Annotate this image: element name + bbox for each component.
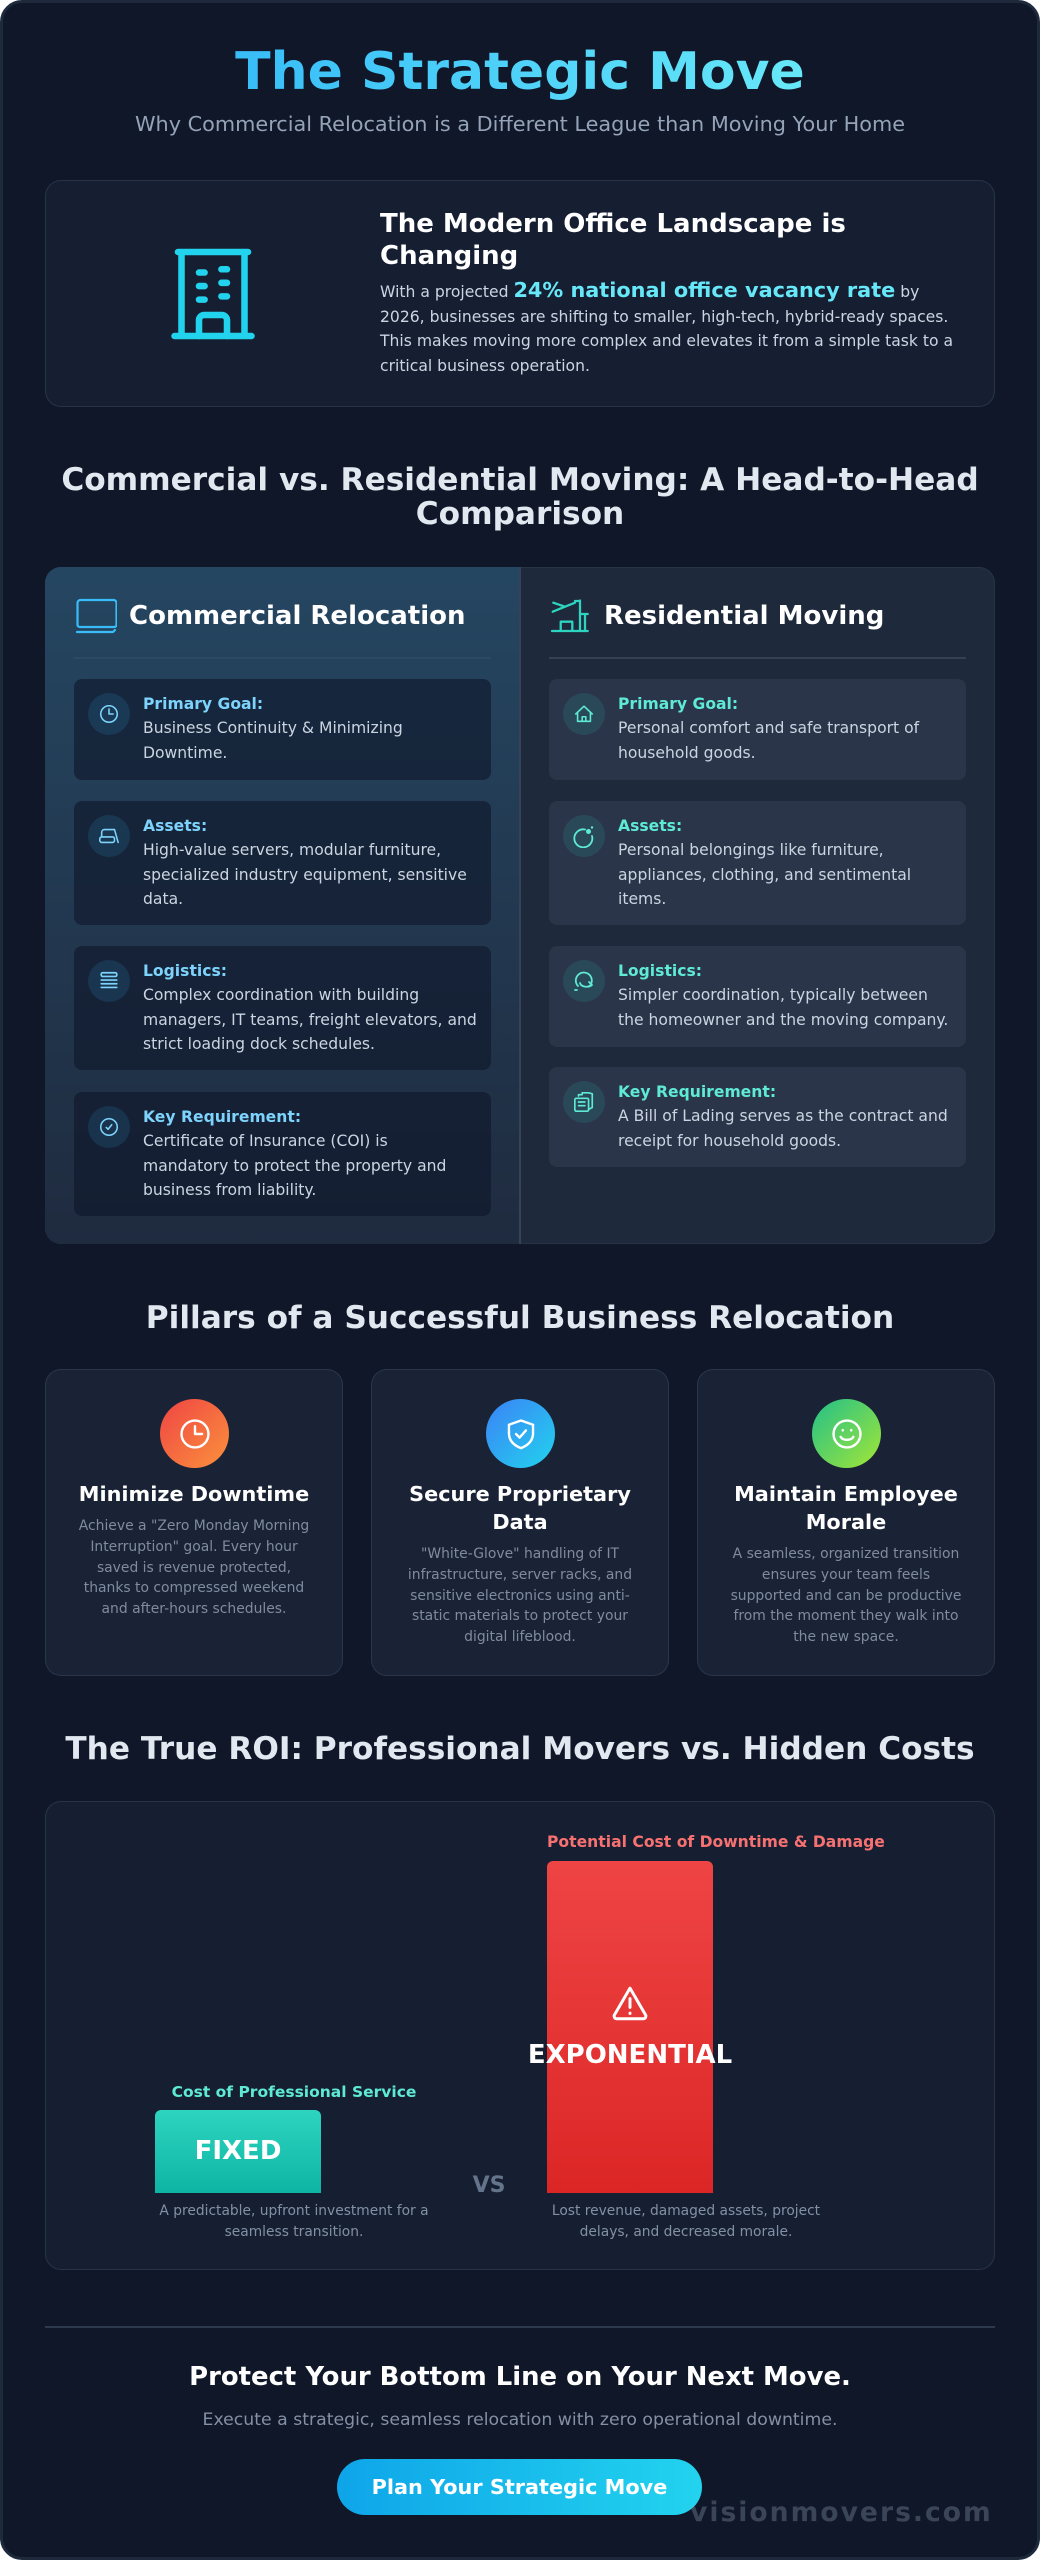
pillar: employee morale <box>697 1369 995 1676</box>
text: key requirement: receipt for household goods. <box>618 1132 841 1150</box>
text: assets: High-value servers, modular furniture, <box>143 841 441 859</box>
call to action button: Plan Your Strategic Move <box>372 2475 667 2499</box>
pillar title <box>734 1482 958 1534</box>
pillar: secure data <box>371 1369 669 1676</box>
heading: comparison: Commercial vs. Residential Moving: A Head-to-Head <box>61 462 979 498</box>
label: professional cost: Cost of Professional Service <box>172 2083 416 2101</box>
pillar title <box>409 1482 631 1534</box>
intro heading <box>380 209 846 271</box>
text: logistics: strict loading dock schedules. <box>143 1035 375 1053</box>
pillar description <box>731 1546 961 1645</box>
text: logistics: the homeowner and the moving company. <box>618 1011 948 1029</box>
icon: check circle <box>88 1106 130 1148</box>
call to action heading: Protect Your Bottom Line on Your Next Move. <box>189 2362 851 2392</box>
text: logistics: Complex coordination with building <box>143 986 419 1004</box>
intro text: 2026, businesses are shifting to smaller, high-tech, hybrid-ready spaces. <box>380 308 948 326</box>
text: primary goal: Primary Goal: <box>618 695 738 713</box>
residential: primary goal <box>549 679 966 780</box>
intro heading: The Modern Office Landscape is <box>380 209 846 239</box>
pillar title: Data <box>492 1510 548 1534</box>
text: logistics: managers, IT teams, freight elevators, and <box>143 1011 477 1029</box>
pillar: minimize downtime <box>45 1369 343 1676</box>
text: logistics: Simpler coordination, typically between <box>618 986 928 1004</box>
text: assets <box>143 817 467 908</box>
icon: coordination <box>563 960 605 1002</box>
description: exponential: Lost revenue, damaged assets, project <box>552 2203 820 2219</box>
icon: home <box>563 693 605 735</box>
text: assets: Assets: <box>143 817 207 835</box>
text: key requirement: Key Requirement: <box>143 1108 301 1126</box>
heading: pillars: Pillars of a Successful Business Relocation <box>146 1300 894 1336</box>
bar: fixed <box>155 2110 321 2193</box>
commercial: logistics <box>74 946 491 1070</box>
column background: commercial <box>45 567 519 1244</box>
description: fixed <box>159 2203 429 2240</box>
bar: exponential <box>547 1861 713 2193</box>
text: assets: appliances, clothing, and sentimental <box>618 866 911 884</box>
text: assets: data. <box>143 890 183 908</box>
pillar description <box>78 1518 309 1617</box>
pillar description: ensures your team feels <box>762 1567 930 1583</box>
pillar title: Secure Proprietary <box>409 1482 631 1506</box>
footer rule <box>45 2326 995 2328</box>
heading: comparison <box>61 462 979 532</box>
bar value: exponential: EXPONENTIAL <box>528 2040 732 2070</box>
text: primary goal <box>143 695 403 762</box>
commercial: key requirement <box>74 1092 491 1216</box>
right header rule <box>549 657 966 659</box>
pillar title: Minimize Downtime <box>79 1482 309 1506</box>
text: key requirement: Certificate of Insurance (COI) is <box>143 1132 388 1150</box>
icon: office building <box>171 248 255 340</box>
residential: assets <box>549 801 966 925</box>
intro text: critical business operation. <box>380 356 590 374</box>
pillar description: infrastructure, server racks, and <box>408 1567 632 1583</box>
pillar description: Interruption" goal. Every hour <box>90 1539 298 1555</box>
text: primary goal: Business Continuity & Minimizing <box>143 719 403 737</box>
description: exponential: delays, and decreased morale. <box>580 2224 792 2240</box>
watermark: visionmovers.com <box>690 2497 993 2528</box>
text: assets: specialized industry equipment, sensitive <box>143 866 467 884</box>
label: downtime cost: Potential Cost of Downtime & Damage <box>547 1833 885 1851</box>
panel: ROI chart <box>45 1801 995 2270</box>
commercial: primary goal <box>74 679 491 780</box>
icon: smile badge <box>812 1399 881 1468</box>
intro text <box>380 278 953 374</box>
intro heading: Changing <box>380 241 518 271</box>
pillar description <box>408 1546 632 1645</box>
text: assets <box>618 817 911 908</box>
description: exponential <box>552 2203 820 2240</box>
text: key requirement: business from liability. <box>143 1181 316 1199</box>
pillar title: Maintain Employee <box>734 1482 958 1506</box>
intro text: With a projected 24% national office vacancy rate by <box>380 278 919 302</box>
icon: clock <box>88 693 130 735</box>
description: fixed: seamless transition. <box>225 2224 363 2240</box>
pillar description: "White-Glove" handling of IT <box>421 1546 619 1562</box>
call to action button <box>337 2459 702 2515</box>
icon: residential house <box>550 599 589 632</box>
text: assets: items. <box>618 890 666 908</box>
text: primary goal: Primary Goal: <box>143 695 263 713</box>
title: The Strategic Move <box>235 42 805 102</box>
intro text: This makes moving more complex and elevates it from a simple task to a <box>380 332 953 350</box>
header <box>135 42 905 136</box>
text: assets: Personal belongings like furniture, <box>618 841 884 859</box>
pillar description: Achieve a "Zero Monday Morning <box>79 1518 309 1534</box>
icon: warning <box>612 1986 648 2020</box>
text: primary goal: household goods. <box>618 744 756 762</box>
icon: laptop <box>76 598 117 634</box>
icon: clock badge <box>160 1399 229 1468</box>
pillar title: Morale <box>806 1510 886 1534</box>
panel: office landscape intro <box>45 180 995 407</box>
text: logistics <box>143 962 477 1053</box>
text: logistics: Logistics: <box>143 962 227 980</box>
column title: residential: Residential Moving <box>604 601 884 631</box>
subtitle: Why Commercial Relocation is a Different League than Moving Your Home <box>135 112 905 136</box>
text: key requirement <box>618 1083 948 1150</box>
column divider <box>519 567 521 1244</box>
text: primary goal: Personal comfort and safe transport of <box>618 719 919 737</box>
pillar description: and after-hours schedules. <box>102 1601 286 1617</box>
description: fixed: A predictable, upfront investment for a <box>159 2203 429 2219</box>
pillar description: saved is revenue protected, <box>97 1560 291 1576</box>
pillar description: sensitive electronics using anti- <box>410 1588 630 1604</box>
icon: seat <box>88 815 130 857</box>
column title: commercial: Commercial Relocation <box>129 601 466 631</box>
commercial: assets <box>74 801 491 925</box>
icon: stack <box>88 960 130 1002</box>
heading: ROI: The True ROI: Professional Movers vs. Hidden Costs <box>65 1731 975 1767</box>
text: key requirement: A Bill of Lading serves as the contract and <box>618 1107 948 1125</box>
heading: comparison: Comparison <box>416 496 624 532</box>
icon: belongings <box>563 815 605 857</box>
pillar description: from the moment they walk into <box>734 1608 958 1624</box>
text: primary goal: Downtime. <box>143 744 227 762</box>
pillar description: supported and can be productive <box>731 1588 961 1604</box>
bar value: fixed: FIXED <box>195 2136 281 2166</box>
text: assets: Assets: <box>618 817 682 835</box>
panel: comparison <box>45 567 995 1244</box>
text: key requirement: Key Requirement: <box>618 1083 776 1101</box>
VS label: VS <box>473 2173 505 2198</box>
text: logistics <box>618 962 948 1029</box>
pillar description: static materials to protect your <box>412 1608 628 1624</box>
call to action text: Execute a strategic, seamless relocation with zero operational downtime. <box>203 2410 837 2430</box>
left header rule <box>74 657 491 659</box>
pillar description: digital lifeblood. <box>464 1629 576 1645</box>
residential: key requirement <box>549 1067 966 1167</box>
pillar description: A seamless, organized transition <box>733 1546 959 1562</box>
residential: logistics <box>549 946 966 1047</box>
pillar description: thanks to compressed weekend <box>84 1580 304 1596</box>
icon: shield badge <box>486 1399 555 1468</box>
pillar description: the new space. <box>793 1629 899 1645</box>
icon: documents <box>563 1081 605 1123</box>
text: primary goal <box>618 695 920 762</box>
text: key requirement: mandatory to protect the property and <box>143 1157 446 1175</box>
text: key requirement <box>143 1108 446 1199</box>
text: logistics: Logistics: <box>618 962 702 980</box>
